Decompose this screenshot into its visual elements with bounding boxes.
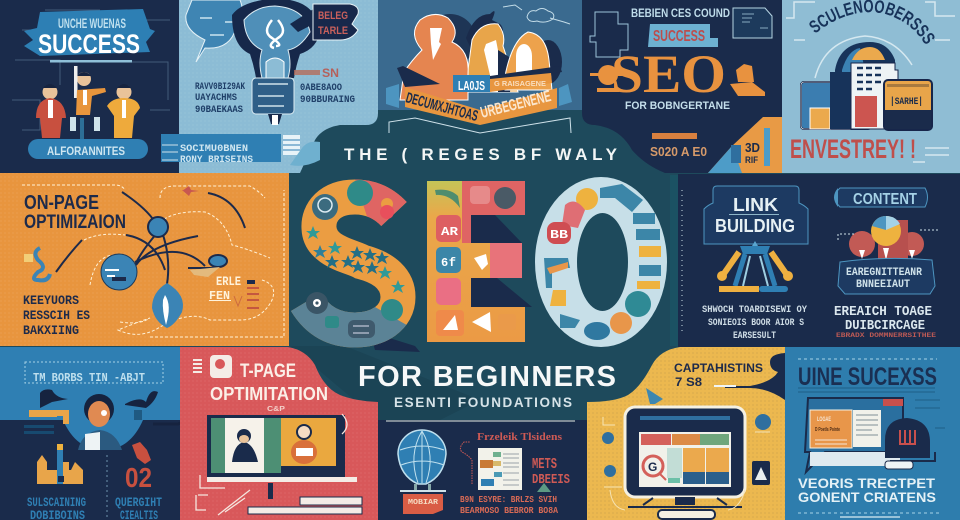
text: content: EREAICH TOAGE — [834, 304, 932, 320]
figure: yellow person — [107, 84, 140, 138]
text: bulb right: 90BBURAING — [300, 95, 355, 106]
portrait — [78, 394, 122, 450]
text: bulb left: 90BAEKAAS — [195, 105, 243, 116]
big letters seo — [306, 177, 667, 352]
success tag: SUCCESS — [653, 28, 705, 45]
document — [478, 448, 522, 490]
speech bubble screen: D Poetls Pointe — [815, 427, 840, 433]
ribbon banner — [386, 66, 572, 125]
strip: caption bar: RONY BRISEINS — [180, 155, 253, 166]
link building box: LINK — [733, 195, 778, 215]
panel: idea bulb — [179, 0, 378, 173]
panel: business building — [782, 0, 960, 173]
letter E — [427, 181, 532, 342]
text: content: EBRADX DOMMNERRSITHEE — [836, 332, 937, 339]
figure: orange person — [70, 66, 106, 140]
speech bubble — [186, 0, 242, 62]
text: bulb left — [195, 82, 245, 116]
blob and line — [714, 353, 785, 400]
link building box: BUILDING — [715, 216, 795, 236]
network lines — [56, 192, 245, 290]
speech bubble screen: LOGAE — [817, 417, 831, 423]
seo heading: SEO — [611, 44, 726, 104]
building: |SARHE| — [890, 96, 923, 108]
text: content: DUIBCIRCAGE — [845, 318, 925, 334]
letter O: BB — [550, 228, 568, 242]
panel: on-page optimization — [0, 173, 289, 346]
letter S — [306, 180, 420, 352]
icon: snake — [24, 248, 50, 280]
icon: orange castle — [37, 444, 83, 484]
labels: keywords: RESSCIH ES — [23, 308, 90, 323]
pill label: ALFORANNITES — [47, 144, 125, 158]
icon: document — [193, 355, 232, 378]
subtitle: foundations: ESENTI FOUNDATIONS — [394, 395, 572, 410]
people — [400, 11, 562, 100]
labels: keywords: BAKXIING — [23, 323, 79, 338]
content pill: CONTENT — [853, 191, 917, 208]
panel: captions monitor: CAPTAHISTINS — [674, 361, 763, 375]
icon: pointer — [182, 186, 199, 196]
text: bottom: VEORIS TRECTPET — [798, 476, 936, 491]
text: red lines: BEARMOSO BEBROR BO8A — [460, 506, 559, 516]
cloud — [503, 5, 570, 24]
icon: right tools — [125, 391, 183, 424]
labels: keywords: KEEYUORS — [23, 293, 79, 308]
panel: on-page optimization: OPTIMIZAION — [24, 212, 126, 233]
icon: dome — [885, 418, 935, 469]
panel: team banner — [378, 0, 582, 125]
text: link building: SONIEOIS BOOR AIOR S — [708, 318, 804, 329]
text: red title: Frzeleik Tlsidens — [477, 431, 563, 443]
panel: online success — [785, 347, 960, 520]
monitor — [625, 407, 745, 519]
panel: seo success: S020 A E0 — [650, 144, 707, 159]
badge: BELEG — [318, 10, 348, 22]
text: bulb left: UAYACHMS — [195, 93, 237, 104]
text: link building: EARSESULT — [733, 331, 776, 342]
badge — [313, 4, 358, 40]
icon: red number — [125, 442, 152, 493]
subtitle: for beginners: FOR BEGINNERS — [358, 361, 616, 393]
panel: captions monitor: 7 S8 — [675, 375, 702, 389]
building — [801, 36, 932, 130]
labels: small — [209, 274, 259, 308]
content box — [838, 258, 935, 294]
badge: TARLE — [318, 25, 348, 37]
text: bulb right: 0ABE8AOO — [300, 83, 342, 94]
dashed routes — [22, 185, 284, 337]
text: bottom: GONENT CRIATENS — [798, 490, 936, 505]
success tag — [648, 24, 718, 47]
node: hub — [148, 217, 168, 237]
panel: seo success: FOR BOBNGERTANE — [625, 100, 730, 112]
marks — [196, 414, 347, 515]
strip: caption bar — [161, 134, 320, 166]
content people — [838, 216, 938, 260]
icon: orange sphere — [590, 65, 631, 92]
success banner — [24, 9, 155, 62]
corner block — [708, 117, 782, 173]
icon: orange tool — [730, 64, 765, 96]
pill label — [28, 139, 148, 159]
icon: left tools — [24, 389, 69, 434]
panel: off-page optimization: C&P — [267, 406, 285, 413]
node: leaf — [152, 283, 183, 328]
panel: on-page optimization: ON-PAGE — [24, 192, 99, 214]
icons: side badges — [602, 414, 771, 510]
content box: EAREGNITTEANR — [846, 267, 922, 279]
panel: center bottom — [378, 420, 587, 520]
text: link building: SHWOCH TOARDISEWI OY — [702, 305, 807, 316]
corner block: 3D — [745, 140, 760, 155]
corner block: RIF — [745, 155, 758, 165]
panel: off-page optimization: T-PAGE — [240, 361, 296, 382]
lightbulb — [232, 0, 340, 125]
monitor — [207, 415, 362, 514]
figure: red person — [36, 84, 66, 138]
globe: MOBIAR — [408, 499, 439, 507]
ribbon banner: URBEGENENE — [479, 88, 553, 122]
globe — [398, 430, 446, 514]
text: meis: DBEEIS — [532, 472, 570, 488]
success banner: UNCHE WUENAS — [58, 15, 126, 31]
text: content — [834, 304, 937, 339]
panel: interview: TM BORBS TIN -ABJT — [33, 371, 145, 385]
strip: caption bar: SOCIMU0BNEN — [180, 144, 248, 155]
letter E: AR — [441, 225, 459, 239]
content pill — [834, 188, 928, 208]
labels: bottom left — [27, 495, 162, 520]
panel: captions monitor — [587, 347, 785, 520]
labels: keywords — [23, 293, 90, 338]
text: bottom — [798, 476, 936, 505]
labels: bottom left: QUERGIHT — [115, 495, 162, 510]
success banner: SUCCESS — [38, 29, 140, 59]
ribbon banner: LA0JS — [458, 78, 485, 93]
letter E: 6f — [441, 256, 456, 270]
content box: BNNEEIAUT — [856, 279, 910, 291]
panel: link building and content — [670, 174, 960, 347]
text: meis — [532, 456, 570, 488]
icon: red number: 02 — [125, 462, 152, 493]
text: link building — [702, 305, 807, 342]
tripod — [717, 241, 793, 292]
node: face — [101, 254, 137, 290]
panel: seo success: BEBIEN CES COUND — [631, 6, 730, 20]
monitor: G — [648, 460, 657, 474]
labels: bottom left: SULSCAINING — [27, 495, 86, 510]
labels: small: FEN — [209, 289, 230, 303]
link building box — [704, 186, 808, 244]
panel: off-page optimization: OPTIMITATION — [210, 384, 328, 404]
labels: small: ERLE — [216, 274, 241, 289]
text: bulb left: RAVV0BI29AK — [195, 82, 245, 93]
node: small — [190, 255, 227, 277]
panel: interview — [0, 347, 183, 520]
bracket — [389, 118, 571, 133]
text: bulb right: SN — [322, 66, 339, 80]
speech bubble screen — [805, 398, 903, 472]
panel: success team — [0, 0, 179, 173]
text: meis: METS — [532, 456, 557, 473]
text: bulb right — [294, 66, 355, 106]
text: red lines: B9N ESYRE: BRLZS SVIH — [460, 495, 557, 505]
ribbon banner: G RAISAGENE — [494, 81, 546, 88]
panel: seo success — [582, 0, 782, 173]
panel: off-page optimization — [180, 347, 378, 520]
title line: THE ( REGES BF WALY — [344, 145, 618, 164]
ribbon banner: DECUMXJHTOAS — [404, 89, 480, 125]
letter O — [535, 177, 667, 347]
text: red lines — [460, 495, 559, 516]
